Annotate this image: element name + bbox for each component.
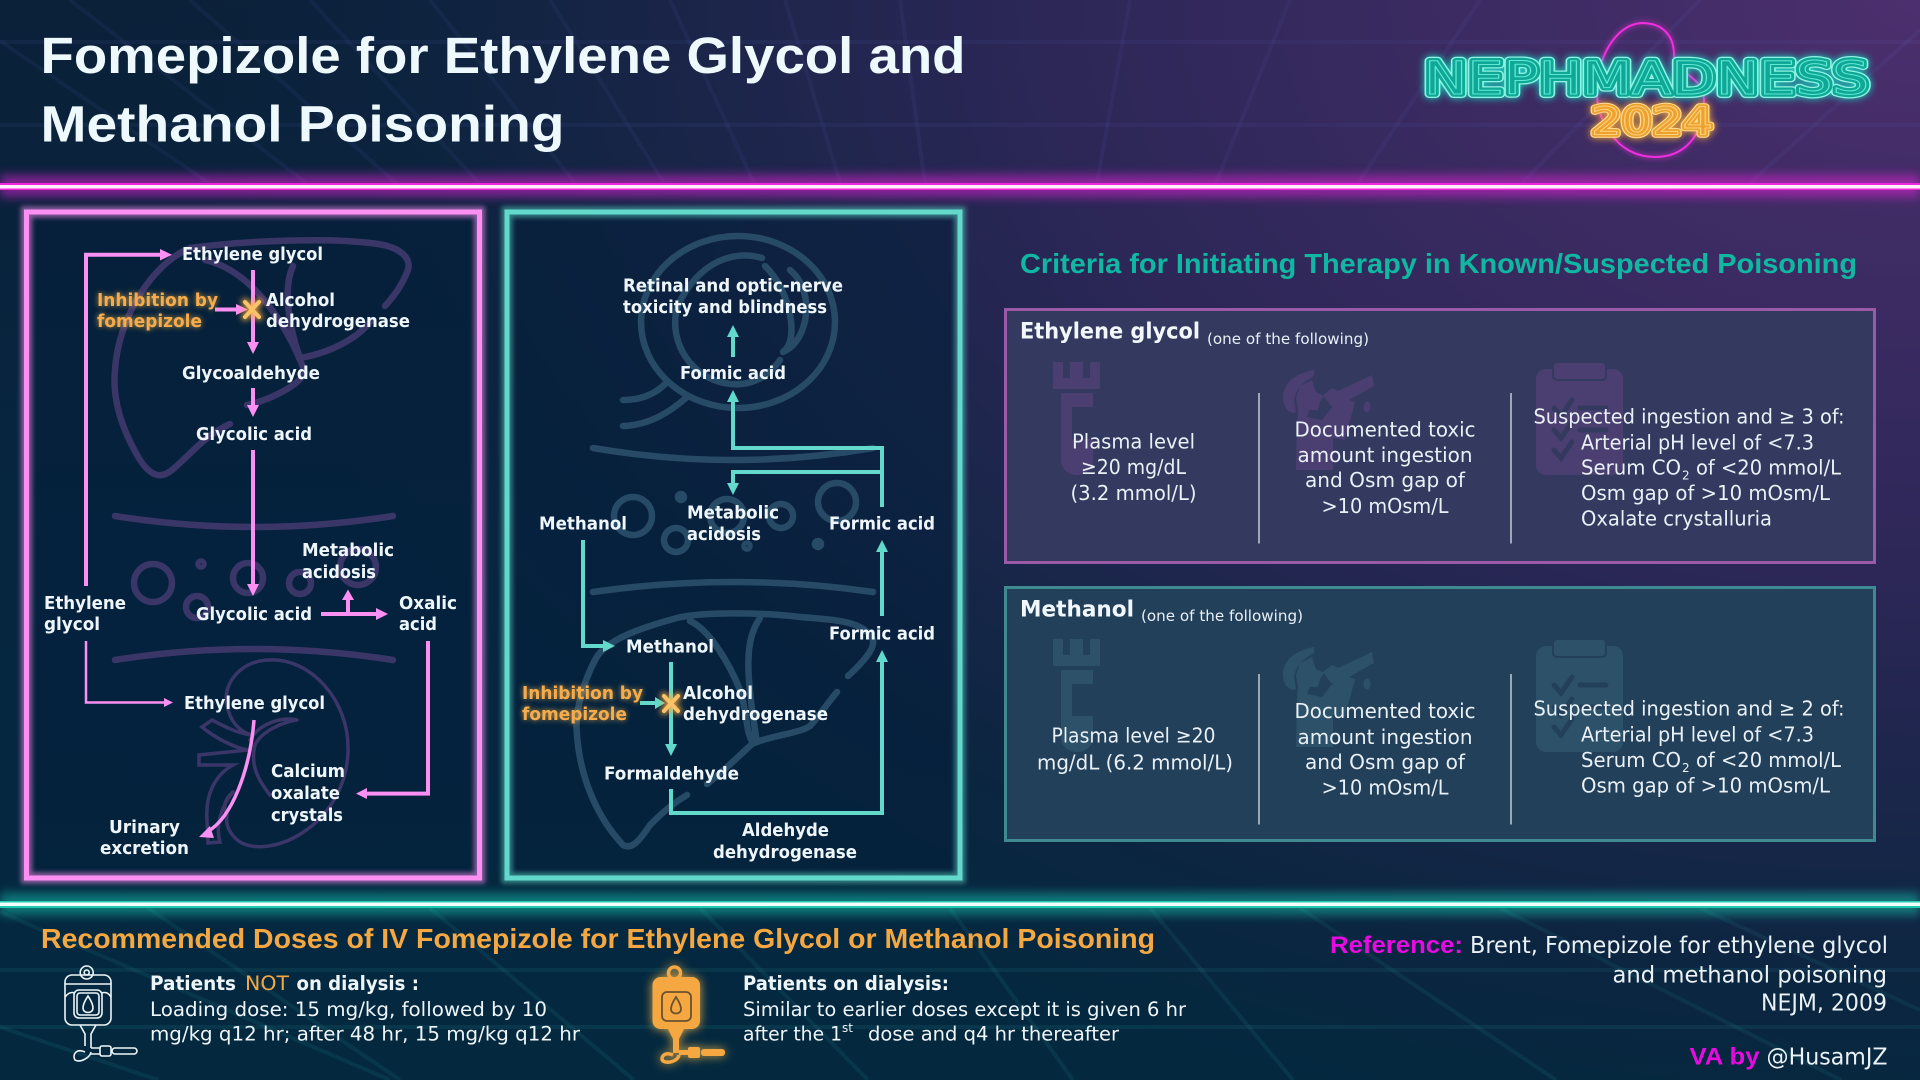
logo wordmark: NEPHMADNESS [1424,52,1869,105]
pathway labels: Calcium [271,761,345,782]
pathway labels: Ethylene glycol [184,693,325,714]
text: patients on dialysis: st [842,1021,853,1035]
logo year: 2024 [1591,100,1713,144]
criterion: documented ingestion: >10 mOsm/L [1322,776,1449,800]
pathway labels: toxicity and blindness [623,297,827,318]
pathway labels: Aldehyde [742,820,829,841]
teal flow arrows [583,325,888,813]
pathway labels: dehydrogenase [266,311,410,332]
pathway labels: Methanol [626,636,714,658]
background: liver, cell and kidney outlines [114,240,409,847]
text: patients on dialysis: after the 1 [743,1022,842,1046]
panel: ethylene glycol criteria [1006,310,1874,562]
panel: ethylene glycol pathway [26,212,480,878]
text: patients not on dialysis: Patients [150,972,236,995]
criterion: documented ingestion [1294,418,1476,518]
qualifier: (one of the following) [1141,607,1303,625]
criterion: suspected ingestion: 2 [1682,468,1690,482]
panel: methanol criteria [1006,588,1874,840]
pathway labels: Urinary [109,817,180,838]
criterion: suspected ingestion: Serum CO [1581,456,1681,480]
pathway labels: Inhibition by [97,290,218,311]
criterion: documented ingestion: Documented toxic [1294,699,1476,723]
reference: Brent, Fomepizole for ethylene glycol [1470,933,1888,959]
sub-heading: Ethylene glycol [1020,320,1200,344]
panel: methanol pathway [507,212,960,878]
logo year: 2024 [1591,100,1713,144]
criterion: suspected ingestion [1534,696,1844,798]
criterion: suspected ingestion: Osm gap of >10 mOsm/L [1581,481,1831,505]
ghost icon: blood tube [1053,362,1100,475]
pathway labels: Glycoaldehyde [182,363,320,384]
criterion: suspected ingestion: Serum CO [1581,748,1681,772]
criterion: suspected ingestion: 2 [1682,761,1690,775]
ghost icon: person drinking [1283,370,1374,470]
credit: @HusamJZ [1766,1044,1888,1070]
pathway labels: Ethylene glycol [182,244,323,265]
criterion: documented ingestion: and Osm gap of [1305,468,1466,492]
pathway labels: Formic acid [829,624,935,644]
pathway labels: Formic acid [829,514,935,534]
criterion: documented ingestion: >10 mOsm/L [1322,494,1449,518]
criterion: suspected ingestion: Suspected ingestion and ≥ 2 of: [1534,696,1844,720]
pathway labels: Formaldehyde [604,764,739,784]
criterion: suspected ingestion [1534,404,1844,530]
criterion: plasma level: mg/dL (6.2 mmol/L) [1037,750,1233,774]
criterion: suspected ingestion: Arterial pH level of <7.3 [1581,722,1814,746]
text: patients not on dialysis: NOT [245,972,289,995]
criterion: documented ingestion: and Osm gap of [1305,750,1466,774]
credit: VA by [1690,1044,1760,1070]
criterion: suspected ingestion: Oxalate crystalluria [1581,506,1772,530]
pathway labels: Oxalic [399,593,457,614]
criterion: suspected ingestion: of <20 mmol/L [1696,456,1842,480]
pathway labels: Glycolic acid [196,604,312,625]
criterion: plasma level: ≥20 mg/dL [1081,455,1187,479]
pathway labels: Retinal and optic-nerve [623,276,843,296]
criterion: plasma level [1037,724,1233,774]
background: eye, cell and liver outlines [577,236,873,846]
ghost icon: clipboard [1536,362,1623,475]
pathway labels: Inhibition by [522,683,643,704]
heading: criteria: Criteria for Initiating Therapy in Known/Suspected Poisoning [1020,248,1857,279]
pathway labels: Methanol [539,514,627,534]
pathway labels: dehydrogenase [683,704,828,725]
pathway labels: Alcohol [266,290,335,311]
criterion: suspected ingestion: of <20 mmol/L [1696,748,1842,772]
title: Fomepizole for Ethylene Glycol and [40,27,966,84]
icon: IV bag outline [65,966,137,1061]
criterion: suspected ingestion: Arterial pH level of <7.3 [1581,430,1814,454]
criterion: suspected ingestion: Osm gap of >10 mOsm/L [1581,774,1831,798]
criterion: documented ingestion: Documented toxic [1294,418,1476,442]
pathway labels: dehydrogenase [713,842,857,863]
criterion: documented ingestion [1294,699,1476,800]
text: patients not on dialysis: on dialysis : [296,972,419,995]
pathway labels: fomepizole [97,311,202,332]
text: patients not on dialysis: mg/kg q12 hr; after 48 hr, 15 mg/kg q12 hr [150,1022,581,1046]
criterion: documented ingestion: amount ingestion [1298,443,1472,467]
text: patients not on dialysis: Loading dose: 15 mg/kg, followed by 10 [150,998,547,1021]
reference: Reference: [1330,932,1463,959]
pathway labels: acidosis [687,524,761,545]
reference: and methanol poisoning [1612,962,1887,988]
reference [1330,932,1888,1016]
criterion: plasma level: Plasma level ≥20 [1052,724,1216,748]
neon divider: top [0,175,1920,197]
pink flow arrows [86,249,428,838]
pathway labels: Glycolic acid [196,424,312,445]
pathway labels: Metabolic [302,540,394,561]
pathway labels: Formic acid [680,363,786,384]
text: patients on dialysis: Similar to earlier doses except it is given 6 hr [743,998,1187,1021]
neon divider: bottom [0,893,1920,915]
pathway labels: acid [399,614,437,635]
criterion: plasma level: (3.2 mmol/L) [1070,481,1196,505]
pathway labels: fomepizole [522,704,627,725]
logo neon kidney outline [1597,23,1704,157]
text: patients not on dialysis [150,972,581,1046]
pathway labels [44,244,457,859]
title: Methanol Poisoning [40,96,564,152]
pathway labels: Metabolic [687,502,779,524]
logo wordmark: NEPHMADNESS [1424,52,1869,105]
qualifier: (one of the following) [1207,330,1369,348]
logo wordmark: NEPHMADNESS [1424,52,1869,105]
pathway labels [522,276,935,863]
title [40,27,966,152]
pathway labels: acidosis [302,562,376,583]
pathway labels: Ethylene [44,593,126,614]
ghost icon: blood tube [1053,639,1100,752]
pathway labels: oxalate [271,783,340,804]
ghost icon: clipboard [1536,639,1623,752]
reference: NEJM, 2009 [1761,990,1887,1016]
sub-heading: Methanol [1020,598,1134,622]
text: patients on dialysis: dose and q4 hr thereafter [868,1022,1120,1046]
ghost icon: person drinking [1283,647,1374,747]
criterion: documented ingestion: amount ingestion [1298,725,1472,749]
pathway labels: excretion [100,838,189,859]
criterion: plasma level [1070,430,1196,505]
icon: inhibition X [664,696,678,711]
pathway labels: crystals [271,805,343,826]
pathway labels: glycol [44,614,100,635]
icon: inhibition X [245,302,259,317]
logo: NephMadness 2024 [1424,23,1869,157]
icon: IV bag filled [652,967,725,1062]
criterion: plasma level: Plasma level [1072,430,1195,454]
credit [1690,1044,1888,1070]
pathway labels: Alcohol [683,683,753,704]
text: patients on dialysis: Patients on dialysis: [743,972,949,995]
text: patients on dialysis [743,972,1187,1046]
heading: recommended doses: Recommended Doses of IV Fomepizole for Ethylene Glycol or Methanol Poisoning [41,923,1155,954]
logo year: 2024 [1591,100,1713,144]
criterion: suspected ingestion: Suspected ingestion and ≥ 3 of: [1534,404,1844,428]
